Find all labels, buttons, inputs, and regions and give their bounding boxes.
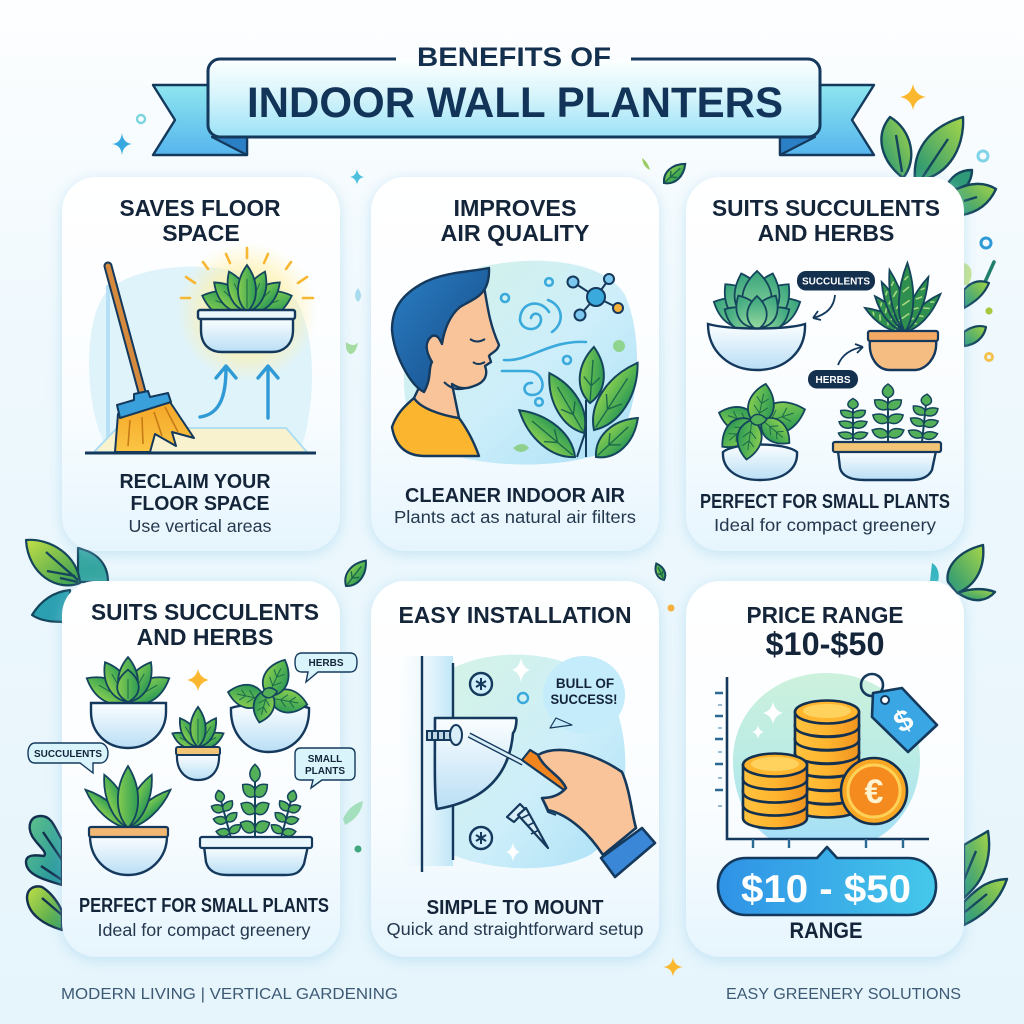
- icon: euro coin: [841, 758, 907, 824]
- heading price: $10-$50: [766, 626, 884, 662]
- text: cleaner air: CLEANER INDOOR AIR: [405, 485, 626, 507]
- icon: sparkles: [506, 658, 530, 861]
- icon: euro coin: €: [865, 773, 884, 811]
- text: plants filter: Plants act as natural air filters: [394, 507, 636, 527]
- panel: improves air quality: [371, 177, 659, 551]
- chart axes and ticks: [715, 677, 929, 848]
- icon: herb planter: [226, 655, 309, 752]
- icon: wall planter with plant: [181, 248, 313, 352]
- title banner: [153, 42, 874, 155]
- floor line: [85, 452, 316, 454]
- icon: succulent bowl: [708, 269, 806, 370]
- decoration: leaves at upper left of bottom row: [26, 540, 108, 622]
- label line two: PLANTS: [305, 766, 345, 777]
- title main text: INDOOR WALL PLANTERS: [247, 79, 783, 127]
- banner outline: [208, 59, 820, 137]
- label: succulents: [797, 271, 875, 320]
- label: herbs: [808, 344, 863, 388]
- icon: small plant cup: [170, 707, 226, 780]
- label: small plants bubble: [295, 748, 355, 788]
- icon: air plant: [512, 340, 649, 466]
- heading line two: AND HERBS: [758, 220, 894, 246]
- heading: SUITS SUCCULENTS: [712, 195, 940, 221]
- text: use vertical areas: Use vertical areas: [128, 516, 272, 536]
- heading: IMPROVES: [454, 195, 576, 221]
- panel: suits succulents and herbs: [686, 177, 964, 551]
- icon: price tag: $: [888, 703, 919, 740]
- icon: herb trough: [200, 764, 312, 875]
- chart: short coin stack: [743, 754, 807, 828]
- icon: price tag: [861, 674, 937, 752]
- right ribbon tail: [780, 85, 874, 155]
- price pill: [718, 847, 936, 915]
- left ribbon fold: [212, 137, 247, 155]
- bubble line two: SUCCESS!: [550, 692, 618, 707]
- footer left: MODERN LIVING | VERTICAL GARDENING: [61, 986, 398, 1003]
- panel: saves floor space: [62, 177, 340, 551]
- decoration: sparkles, rings and small leaves: [112, 84, 926, 977]
- title kicker: BENEFITS OF: [417, 42, 611, 72]
- price pill: $10 - $50: [741, 868, 911, 911]
- text: ideal for compact greenery: Ideal for compact greenery: [714, 515, 936, 535]
- icon: breath swirls: [501, 278, 586, 406]
- label: herbs: HERBS: [815, 375, 851, 386]
- speech bubble: bull of success: [543, 656, 625, 734]
- speech bubble: bull of success: BULL OF: [556, 676, 614, 691]
- label: herbs bubble: [295, 653, 357, 682]
- label: small plants bubble: SMALL: [308, 754, 342, 765]
- icon: succulent planter: [81, 657, 175, 748]
- icon: mounting screw: [427, 725, 462, 745]
- illustration backdrop: [733, 673, 920, 839]
- label: succulents bubble: SUCCULENTS: [34, 749, 102, 760]
- heading line two: AIR QUALITY: [440, 220, 590, 246]
- heading: EASY INSTALLATION: [398, 602, 632, 628]
- icon: screwdriver and hand: [469, 735, 655, 877]
- label: succulents: SUCCULENTS: [802, 276, 870, 288]
- icon: up arrows: [200, 366, 278, 418]
- text: perfect for small plants: PERFECT FOR SMALL PLANTS: [79, 895, 329, 917]
- icon: person profile: [392, 268, 499, 456]
- icon: snake plant pot: [862, 263, 945, 370]
- icon: herb trough: [833, 384, 944, 480]
- heading line two: SPACE: [162, 220, 240, 246]
- text: reclaim your: RECLAIM YOUR: [120, 471, 271, 493]
- footer right: EASY GREENERY SOLUTIONS: [726, 986, 961, 1003]
- chart: tall coin stack: [795, 700, 859, 818]
- text: ideal for compact greenery: Ideal for compact greenery: [98, 920, 311, 940]
- wall lines: [422, 656, 453, 872]
- decoration: leaves right of bottom row: [930, 545, 995, 600]
- icon: wall screws: [470, 673, 492, 849]
- panel: easy installation: [371, 581, 659, 957]
- panel: suits succulents and herbs second: [28, 581, 357, 957]
- text: perfect for small plants: PERFECT FOR SMALL PLANTS: [700, 491, 950, 513]
- sparkles: [752, 702, 783, 739]
- wall edge: [106, 285, 110, 440]
- icon: molecule: [568, 274, 623, 320]
- decoration: right edge leaves: [964, 262, 994, 360]
- wall shading: [398, 656, 453, 866]
- icon: star: [187, 669, 209, 691]
- floor: [94, 428, 307, 452]
- text: floor space: FLOOR SPACE: [130, 493, 270, 515]
- illustration backdrop: [89, 267, 312, 452]
- left ribbon tail: [153, 85, 247, 155]
- illustration backdrop: [404, 261, 637, 465]
- illustration backdrop: [453, 655, 625, 868]
- label: succulents bubble: [28, 743, 108, 773]
- glow: [177, 242, 317, 382]
- decoration: leaves lower right: [964, 831, 1007, 925]
- heading: PRICE RANGE: [746, 602, 904, 628]
- text: quick setup: Quick and straightforward setup: [386, 919, 644, 939]
- heading: SAVES FLOOR: [120, 195, 281, 221]
- decoration: top right foliage: [881, 117, 996, 215]
- banner plate: [208, 59, 820, 137]
- icon: blade plant bowl: [81, 766, 175, 875]
- icon: broom: [108, 266, 194, 452]
- heading: SUITS SUCCULENTS: [91, 599, 319, 625]
- icon: basil bowl: [714, 381, 810, 480]
- panel: price range: [686, 581, 964, 957]
- decoration: teal leaves at lower left: [26, 816, 62, 930]
- icon: loose screw: [507, 804, 548, 848]
- right ribbon fold: [780, 137, 815, 155]
- heading line two: AND HERBS: [137, 624, 273, 650]
- decoration: rings top right: [978, 151, 991, 248]
- icon: planter bracket: [435, 718, 516, 809]
- text: range: RANGE: [790, 918, 862, 943]
- text: simple to mount: SIMPLE TO MOUNT: [426, 897, 604, 919]
- label: herbs bubble: HERBS: [308, 658, 344, 669]
